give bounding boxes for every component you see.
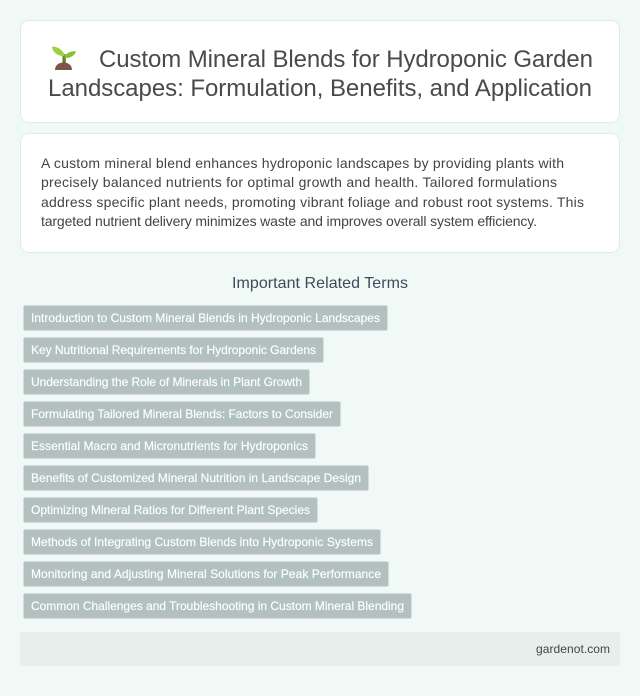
tag 1: Introduction to Custom Mineral Blends in Hydroponic Landscapes — [31, 311, 380, 325]
tag 3 — [24, 370, 310, 394]
tag list — [24, 306, 412, 618]
text block: summary paragraph: address specific plant needs, promoting vibrant foliage and robust root systems. This — [41, 194, 584, 210]
tag 6 — [24, 466, 368, 490]
tag 1 — [24, 306, 388, 330]
tag 9: Monitoring and Adjusting Mineral Solutions for Peak Performance — [31, 567, 381, 581]
tag 2 — [24, 338, 324, 362]
text block: summary paragraph: targeted nutrient delivery minimizes waste and improves overall system efficiency. — [41, 213, 537, 229]
tag 8 — [24, 530, 380, 554]
tag 4 — [24, 402, 340, 426]
panel: title card — [20, 20, 620, 122]
text block: summary paragraph: A custom mineral blend enhances hydroponic landscapes by providing plants with — [41, 155, 564, 171]
tag 5: Essential Macro and Micronutrients for Hydroponics — [31, 439, 308, 453]
tag 6: Benefits of Customized Mineral Nutrition in Landscape Design — [31, 471, 361, 485]
tag 5 — [24, 434, 316, 458]
tag 10: Common Challenges and Troubleshooting in Custom Mineral Blending — [31, 599, 404, 613]
footer — [20, 632, 620, 666]
tag 7 — [24, 498, 318, 522]
tag 3: Understanding the Role of Minerals in Plant Growth — [31, 375, 302, 389]
text block: summary paragraph — [41, 155, 584, 229]
tag 4: Formulating Tailored Mineral Blends: Factors to Consider — [31, 407, 333, 421]
text block: summary paragraph: precisely balanced nutrients for optimal growth and health. Tailored formulations — [41, 174, 557, 190]
tag 8: Methods of Integrating Custom Blends into Hydroponic Systems — [31, 535, 373, 549]
panel: title card: Landscapes: Formulation, Benefits, and Application — [48, 75, 592, 102]
heading: related terms: Important Related Terms — [232, 275, 408, 292]
tag 7: Optimizing Mineral Ratios for Different Plant Species — [31, 503, 310, 517]
tag 2: Key Nutritional Requirements for Hydroponic Gardens — [31, 343, 316, 357]
tag 10 — [24, 594, 412, 618]
footer source text: gardenot.com — [536, 642, 610, 656]
title: Custom Mineral Blends for Hydroponic Garden — [99, 46, 593, 73]
tag 9 — [24, 562, 388, 586]
panel: summary — [20, 134, 620, 252]
icon: seedling — [52, 46, 76, 70]
